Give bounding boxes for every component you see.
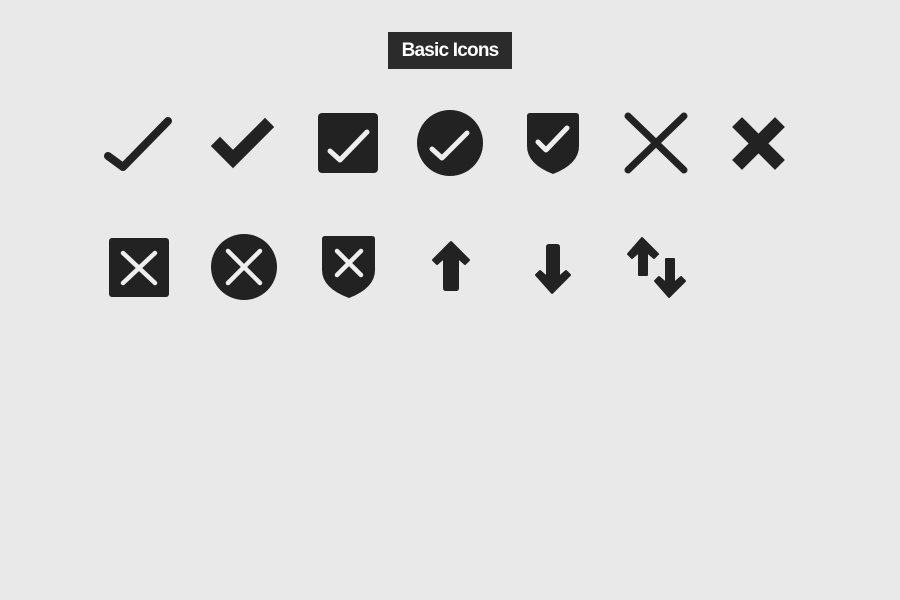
icon: up-down arrows [628, 238, 685, 297]
icon: cross in square [109, 238, 169, 297]
icon: cross in circle [211, 234, 277, 300]
icon: cross in shield [322, 236, 375, 298]
icon: thin cross [628, 116, 684, 170]
icon: down arrow [536, 245, 570, 293]
icon: check in shield [527, 113, 579, 174]
icon: up arrow [433, 242, 469, 290]
title: Basic Icons [402, 40, 498, 61]
icon: check in square [318, 113, 378, 173]
icon: thin check [108, 121, 168, 167]
title [388, 32, 512, 69]
icon: check in circle [417, 110, 483, 176]
icon: bold cross [742, 127, 775, 160]
icon: bold check [220, 127, 265, 159]
